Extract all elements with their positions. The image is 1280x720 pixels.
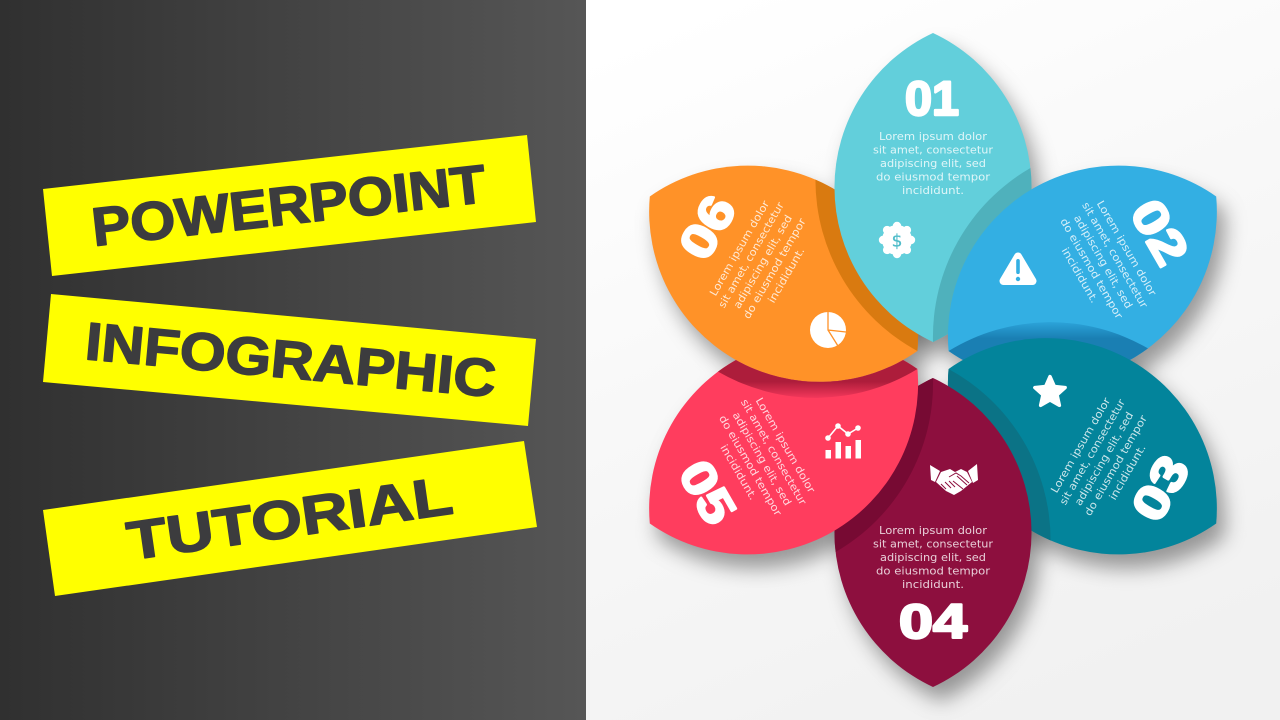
text block 05: do eiusmod tempor bbox=[716, 413, 784, 519]
petal 04 shape bbox=[834, 378, 1032, 687]
text block 03: Lorem ipsum dolor bbox=[1049, 395, 1114, 495]
petal 05 shape bbox=[649, 360, 918, 554]
icon: star bbox=[1035, 376, 1065, 405]
panel: petal 05 pink bbox=[649, 360, 918, 554]
text block 04 bbox=[873, 525, 994, 591]
text block 02: sit amet, consectetur bbox=[1079, 200, 1150, 311]
text block 05 bbox=[703, 391, 820, 528]
text block 01 bbox=[873, 131, 994, 197]
number 01: 01 bbox=[905, 73, 959, 126]
text block 03 bbox=[1046, 390, 1163, 527]
icon: gear with dollar: $ bbox=[892, 232, 902, 252]
petal 02 shape bbox=[899, 111, 1265, 436]
text block 02: do eiusmod tempor bbox=[1057, 216, 1125, 322]
text block 05: adipiscing elit, sed bbox=[730, 410, 793, 508]
text block 04: incididunt. bbox=[902, 579, 964, 591]
number 02: 02 bbox=[1119, 191, 1198, 275]
text block 01: do eiusmod tempor bbox=[876, 172, 991, 184]
text block 02: adipiscing elit, sed bbox=[1071, 213, 1134, 311]
banner: POWERPOINT: POWERPOINT bbox=[89, 154, 489, 258]
panel: petal 02 blue bbox=[899, 111, 1265, 436]
number 03: 03 bbox=[1122, 447, 1201, 531]
banner: INFOGRAPHIC: INFOGRAPHIC bbox=[83, 312, 499, 409]
panel: light right background bbox=[586, 0, 1280, 720]
number 05: 05 bbox=[668, 452, 746, 534]
text block 04: Lorem ipsum dolor bbox=[879, 525, 988, 537]
icon: handshake bbox=[930, 464, 978, 495]
text block 02: incididunt. bbox=[1059, 246, 1100, 305]
text block 06: incididunt. bbox=[766, 246, 807, 305]
panel: petal 03 dark teal bbox=[899, 284, 1265, 609]
icon: line and bar chart bbox=[825, 423, 861, 458]
petal 01 shape bbox=[834, 33, 1032, 342]
text block 03: sit amet, consectetur bbox=[1058, 397, 1128, 507]
text block 01: incididunt. bbox=[902, 185, 964, 197]
text block 01: adipiscing elit, sed bbox=[880, 158, 986, 170]
flower drop shadow bbox=[609, 47, 1273, 701]
number 04: 04 bbox=[899, 596, 967, 649]
banner: TUTORIAL: TUTORIAL bbox=[123, 466, 456, 572]
icon: pie chart bbox=[810, 312, 846, 348]
text block 06 bbox=[705, 193, 822, 330]
text block 01: Lorem ipsum dolor bbox=[879, 131, 988, 143]
panel: petal 01 light teal bbox=[834, 33, 1032, 342]
text block 05: sit amet, consectetur bbox=[738, 397, 809, 508]
banner: TUTORIAL bbox=[43, 441, 537, 596]
text block 04: sit amet, consectetur bbox=[873, 538, 994, 550]
panel: dark left background bbox=[0, 0, 586, 720]
text block 04: do eiusmod tempor bbox=[876, 566, 991, 578]
number 06: 06 bbox=[669, 187, 747, 269]
text block 02 bbox=[1044, 194, 1162, 331]
text block 06: do eiusmod tempor bbox=[741, 216, 809, 321]
text block 05: incididunt. bbox=[717, 443, 759, 502]
text block 02: Lorem ipsum dolor bbox=[1094, 199, 1159, 299]
text block 03: adipiscing elit, sed bbox=[1073, 410, 1136, 508]
icon: gear with dollar bbox=[879, 222, 915, 258]
text block 03: do eiusmod tempor bbox=[1082, 413, 1150, 518]
petal 03 shape bbox=[899, 284, 1265, 609]
text block 03: incididunt. bbox=[1107, 443, 1149, 502]
icon: warning triangle bbox=[1004, 256, 1032, 281]
panel: petal 04 maroon bbox=[834, 378, 1032, 687]
banner: INFOGRAPHIC bbox=[43, 294, 536, 426]
banner: POWERPOINT bbox=[43, 135, 536, 276]
panel: petal 06 orange bbox=[601, 111, 967, 436]
text block 06: adipiscing elit, sed bbox=[732, 213, 795, 311]
text block 06: Lorem ipsum dolor bbox=[708, 198, 772, 298]
text block 05: Lorem ipsum dolor bbox=[753, 396, 817, 496]
text block 06: sit amet, consectetur bbox=[716, 200, 787, 310]
text block 04: adipiscing elit, sed bbox=[880, 552, 986, 564]
text block 01: sit amet, consectetur bbox=[873, 144, 994, 156]
petal 06 shape bbox=[601, 111, 967, 436]
